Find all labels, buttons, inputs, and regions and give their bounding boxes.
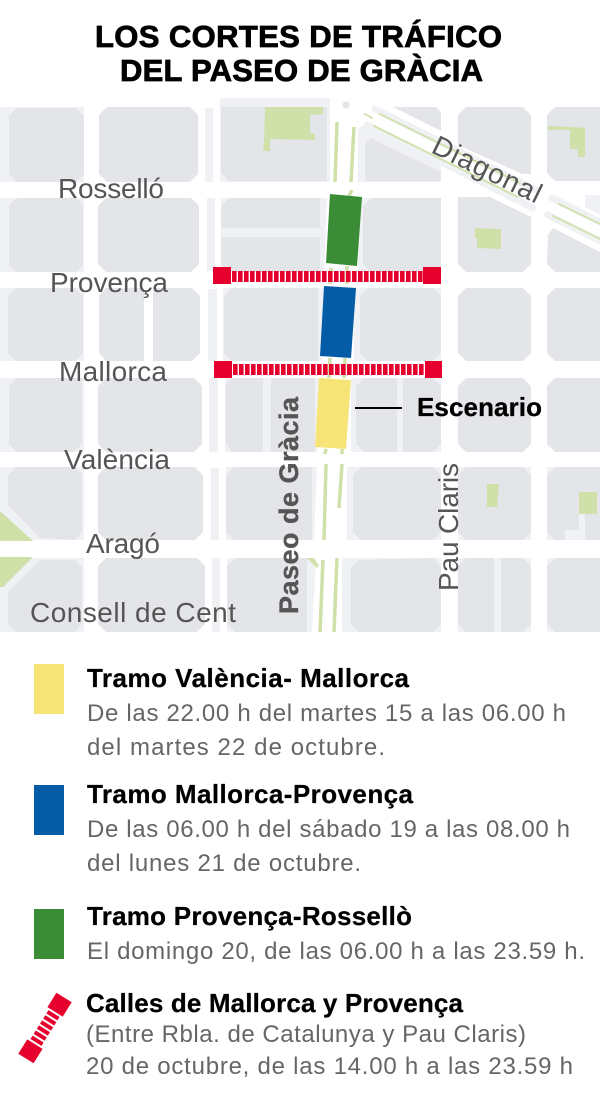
legend item: Mallorca-Provença: Tramo Mallorca-Provença [87, 779, 414, 809]
street label: Rosselló: Rosselló [58, 173, 164, 204]
legend item: València-Mallorca: Tramo València- Mallorca [87, 663, 410, 693]
legend item: València-Mallorca: De las 22.00 h del martes 15 a las 06.00 h [87, 700, 566, 727]
legend item: Provença-Rossellò: Tramo Provença-Rossellò [87, 901, 412, 931]
street label: Pau Claris: Pau Claris [433, 463, 464, 591]
street label: Provença: Provença [50, 267, 168, 298]
legend item: Mallorca-Provença: De las 06.00 h del sábado 19 a las 08.00 h [87, 816, 570, 843]
legend [18, 663, 585, 1080]
legend item: Mallorca and Provença streets: 20 de octubre, de las 14.00 h a las 23.59 h [86, 1053, 573, 1080]
legend item: Mallorca and Provença streets: (Entre Rbla. de Catalunya y Pau Claris) [86, 1021, 526, 1048]
map: white passage [144, 288, 153, 361]
callout: Escenario: Escenario [417, 392, 542, 422]
section: Provença-Rosselló (green) [326, 194, 362, 266]
legend item: Mallorca and Provença streets [18, 988, 573, 1080]
map: sidewalks and block surrounds [0, 98, 600, 632]
closure: Provença street [213, 267, 441, 284]
street label: València: València [64, 444, 170, 475]
section: Mallorca-Provença (blue) [320, 286, 356, 358]
street label: Mallorca: Mallorca [59, 356, 167, 387]
map [0, 98, 600, 632]
map: green areas [0, 107, 597, 632]
closure: Mallorca street [214, 361, 442, 378]
section: València-Mallorca (yellow) [315, 378, 351, 449]
legend item: València-Mallorca [34, 663, 566, 761]
title: LOS CORTES DE TRÁFICO [95, 19, 502, 54]
street label: Diagonal: Diagonal [427, 130, 547, 209]
legend item: Mallorca-Provença [34, 779, 570, 877]
legend item: Mallorca and Provença streets: Calles de Mallorca y Provença [86, 988, 464, 1018]
title: DEL PASEO DE GRÀCIA [120, 53, 483, 88]
icon: street closure [18, 993, 72, 1063]
legend item: Provença-Rossellò: El domingo 20, de las 06.00 h a las 23.59 h. [87, 938, 585, 965]
map: inner passages in blocks [221, 102, 600, 632]
street label: Aragó: Aragó [86, 528, 160, 559]
legend item: València-Mallorca: del martes 22 de octubre. [87, 734, 385, 761]
legend item: Provença-Rossellò [34, 901, 585, 965]
legend item: Mallorca-Provença: del lunes 21 de octubre. [87, 850, 361, 877]
title [95, 19, 502, 88]
street label: Consell de Cent: Consell de Cent [30, 597, 236, 628]
map: Diagonal avenue medians [365, 109, 600, 241]
map: city blocks [8, 107, 600, 632]
street label: Paseo de Gràcia: Paseo de Gràcia [274, 396, 304, 614]
